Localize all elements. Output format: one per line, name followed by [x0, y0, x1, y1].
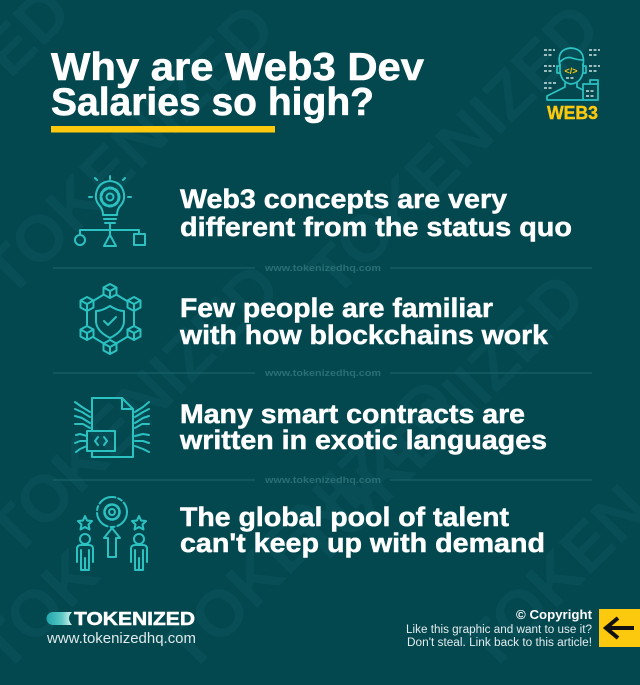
icon: web3 developer	[544, 48, 600, 123]
divider 1: www.tokenizedhq.com	[264, 263, 381, 273]
item 4 text: can't keep up with demand	[180, 528, 545, 558]
icon: code file with circuits	[75, 398, 149, 457]
title: Why are Web3 Dev	[51, 46, 424, 89]
item 4 text	[180, 502, 545, 558]
item 1 text: different from the status quo	[180, 212, 572, 242]
item 2 text: with how blockchains work	[179, 320, 549, 350]
item 1 text: Web3 concepts are very	[180, 184, 507, 214]
divider 2: www.tokenizedhq.com	[264, 368, 381, 378]
icon: logo pill	[47, 612, 72, 625]
item 2 text	[179, 293, 549, 350]
copyright note: Like this graphic and want to use it?	[406, 624, 592, 636]
icon: web3 developer: WEB3	[547, 103, 598, 123]
icon: talent pool	[77, 497, 147, 570]
title underline	[51, 126, 275, 132]
title: Salaries so high?	[51, 81, 374, 124]
copyright note: © Copyright	[516, 607, 593, 622]
item 3 text: Many smart contracts are	[180, 399, 525, 429]
infographic canvas: TOKENIZED	[278, 259, 599, 580]
footer brand	[46, 609, 196, 647]
copyright note	[406, 607, 593, 649]
copyright note: Don't steal. Link back to this article!	[407, 637, 592, 649]
item 3 text	[179, 399, 547, 455]
footer brand: TOKENIZED	[74, 609, 195, 629]
footer brand: www.tokenizedhq.com	[46, 630, 196, 647]
icon: web3 developer: </>	[564, 66, 578, 76]
icon: lightbulb with gear and shapes	[75, 176, 145, 246]
item 2 text: Few people are familiar	[180, 293, 494, 323]
divider 3: www.tokenizedhq.com	[264, 475, 381, 485]
item 3 text: written in exotic languages	[179, 425, 547, 455]
icon: yellow arrow box	[599, 609, 640, 647]
icon: blockchain shield	[80, 284, 140, 354]
infographic canvas: TOKENIZED	[148, 364, 469, 685]
item 4 text: The global pool of talent	[180, 502, 509, 532]
title	[51, 46, 424, 124]
item 1 text	[180, 184, 572, 242]
